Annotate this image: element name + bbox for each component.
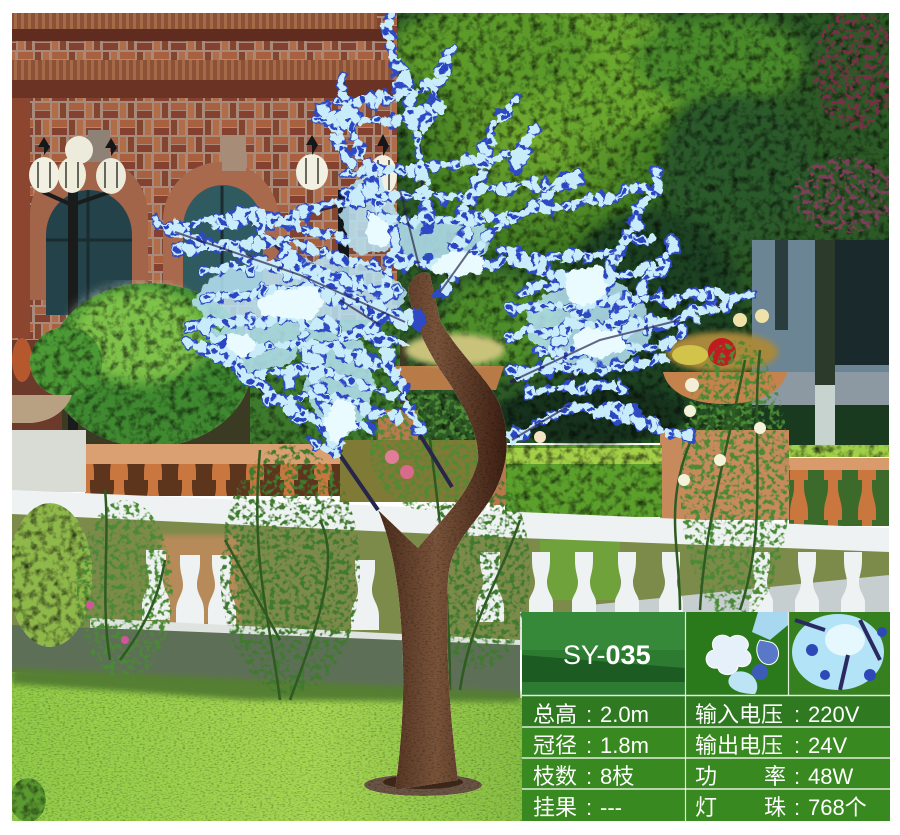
blossom outline layer — [155, 15, 745, 455]
rose stems — [105, 350, 760, 700]
spec text: crown diameter: : — [586, 733, 592, 758]
spec text: input voltage: : — [794, 702, 800, 727]
white balustrade — [12, 490, 889, 650]
spec text: output voltage: : — [794, 733, 800, 758]
street lamps — [29, 134, 397, 440]
spec text: total height: : — [586, 702, 592, 727]
spec text: total height: 总高 — [533, 702, 577, 727]
grid lines — [522, 696, 890, 789]
spec text: output voltage: 24V — [808, 733, 847, 758]
spec text: branch count: : — [586, 764, 592, 789]
spec text: crown diameter: 冠径 — [533, 733, 577, 758]
background trees — [390, 0, 889, 445]
stone base wall — [12, 625, 520, 700]
spec text: LED beads: 灯 — [695, 795, 717, 820]
header cell: model number — [522, 612, 685, 695]
tree trunk — [364, 272, 507, 796]
backdrop behind balustrade — [12, 514, 889, 640]
garden backdrop behind bushes — [62, 320, 407, 444]
background: building wall, right — [752, 240, 889, 445]
rose bushes foliage — [77, 340, 790, 695]
shrub bottom left — [10, 778, 46, 822]
info panel: product specs — [522, 612, 890, 821]
spec text: fruit: --- — [600, 795, 622, 820]
spec text: input voltage: 220V — [808, 702, 860, 727]
brick building — [12, 13, 397, 343]
spec text: power: 功 — [695, 764, 717, 789]
spec text: power: 48W — [808, 764, 853, 789]
spec text: power: : — [794, 764, 800, 789]
peach fence left — [12, 430, 506, 505]
spec text: branch count: 8枝 — [600, 764, 634, 789]
spec text: LED beads: 珠 — [764, 795, 786, 820]
dark branch accents — [175, 190, 680, 440]
maroon foliage — [793, 10, 897, 233]
spec text: LED beads: 768个 — [808, 795, 867, 820]
blossom base masses — [195, 175, 652, 440]
arched windows — [46, 185, 263, 315]
stone pedestal — [660, 430, 789, 520]
planters with flowers — [378, 328, 787, 440]
spec text: input voltage: 输入电压 — [695, 702, 783, 727]
blossom canopy — [155, 15, 745, 455]
spec text: fruit: 挂果 — [533, 795, 577, 820]
peach fence right — [789, 458, 889, 526]
spec text: output voltage: 输出电压 — [695, 733, 783, 758]
lawn — [12, 672, 522, 821]
left shrub — [8, 503, 92, 647]
header cell: model number: SY-035 — [563, 640, 651, 670]
header cell: flower close-up — [686, 612, 788, 695]
spec text: power: 率 — [764, 764, 786, 789]
spec text: branch count: 枝数 — [533, 764, 577, 789]
bushes left — [12, 280, 262, 450]
branches — [155, 15, 745, 452]
spec text: crown diameter: 1.8m — [600, 733, 649, 758]
hedge — [505, 445, 889, 517]
header cell: blossom close-up — [789, 612, 890, 695]
rose flowers — [86, 309, 769, 644]
spec text: fruit: : — [586, 795, 592, 820]
row tint — [522, 696, 890, 727]
blue petal speckle — [155, 15, 745, 455]
blossom face layer — [155, 15, 745, 455]
spec text: LED beads: : — [794, 795, 800, 820]
spec text: total height: 2.0m — [600, 702, 649, 727]
bright blossom centres — [224, 214, 628, 440]
panel background — [522, 612, 890, 821]
shadow on lawn — [12, 668, 520, 702]
